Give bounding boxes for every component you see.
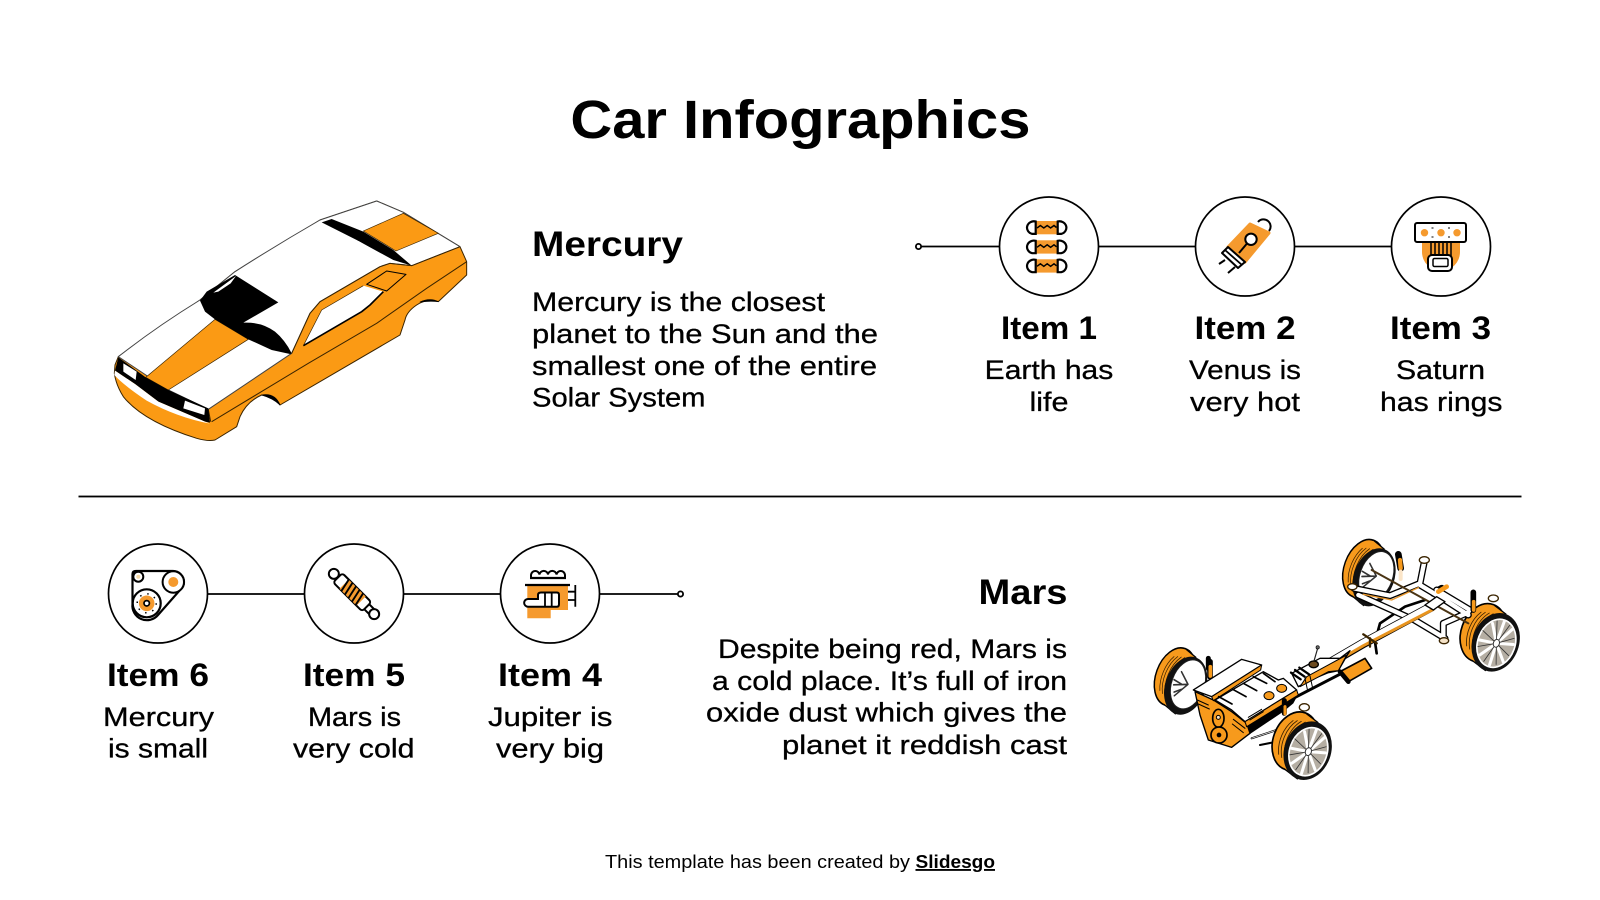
icon: item 1 capsules (1000, 197, 1098, 296)
divider (78, 496, 1522, 497)
text block: Mercury description: Mercury is the closest (532, 287, 826, 317)
item 2 label (1189, 310, 1301, 417)
illustration: orange car body (114, 201, 467, 441)
icon: item 4 engine (500, 544, 600, 643)
text block: Mercury description: planet to the Sun and the (532, 319, 878, 349)
item 4 label: Jupiter is (488, 702, 612, 732)
icon: item 5 shock absorber (304, 544, 404, 643)
item 6 label: Mercury (103, 702, 215, 732)
item 1 label: life (1030, 387, 1068, 417)
timeline: bottom items connector (207, 591, 683, 597)
icon: item 2 spark plug (1196, 197, 1294, 296)
item 3 label: Saturn (1396, 355, 1485, 385)
text block: Mercury description: Solar System (532, 382, 706, 412)
item 4 label (488, 657, 612, 764)
item 1 label: Earth has (985, 355, 1113, 385)
item 5 label: Item 5 (303, 657, 405, 693)
footer credit: This template has been created by (605, 851, 911, 872)
item 2 label: very hot (1190, 387, 1301, 417)
item 3 label: has rings (1380, 387, 1502, 417)
text block: Mars description: planet it reddish cast (782, 730, 1068, 760)
text block: Mercury description: smallest one of the entire (532, 351, 877, 381)
text block: Mars description: Despite being red, Mars is (718, 634, 1067, 664)
footer credit: Slidesgo (916, 851, 995, 872)
heading: Mars: Mars (978, 573, 1068, 612)
item 5 label (293, 657, 414, 764)
item 4 label: Item 4 (498, 657, 602, 693)
item 2 label: Venus is (1189, 355, 1301, 385)
item 6 label: Item 6 (107, 657, 209, 693)
text block: Mars description (706, 634, 1068, 760)
text block: Mars description: a cold place. It’s full of iron (712, 666, 1067, 696)
item 1 label (985, 310, 1113, 417)
illustration: car chassis (1145, 534, 1529, 787)
text block: Mercury description (532, 287, 878, 412)
item 5 label: Mars is (308, 702, 401, 732)
text block: Mars description: oxide dust which gives the (706, 698, 1067, 728)
item 5 label: very cold (293, 734, 414, 764)
timeline: top items connector (916, 244, 1392, 249)
icon: item 3 engine block (1392, 197, 1490, 296)
item 4 label: very big (496, 734, 604, 764)
item 1 label: Item 1 (1001, 310, 1097, 346)
item 3 label: Item 3 (1390, 310, 1491, 346)
item 6 label: is small (108, 734, 208, 764)
item 3 label (1380, 310, 1502, 417)
item 2 label: Item 2 (1194, 310, 1296, 346)
item 6 label (103, 657, 215, 764)
title: Car Infographics (570, 90, 1030, 150)
icon: item 6 belt and pulleys (108, 544, 208, 643)
heading: Mercury: Mercury (532, 225, 684, 264)
